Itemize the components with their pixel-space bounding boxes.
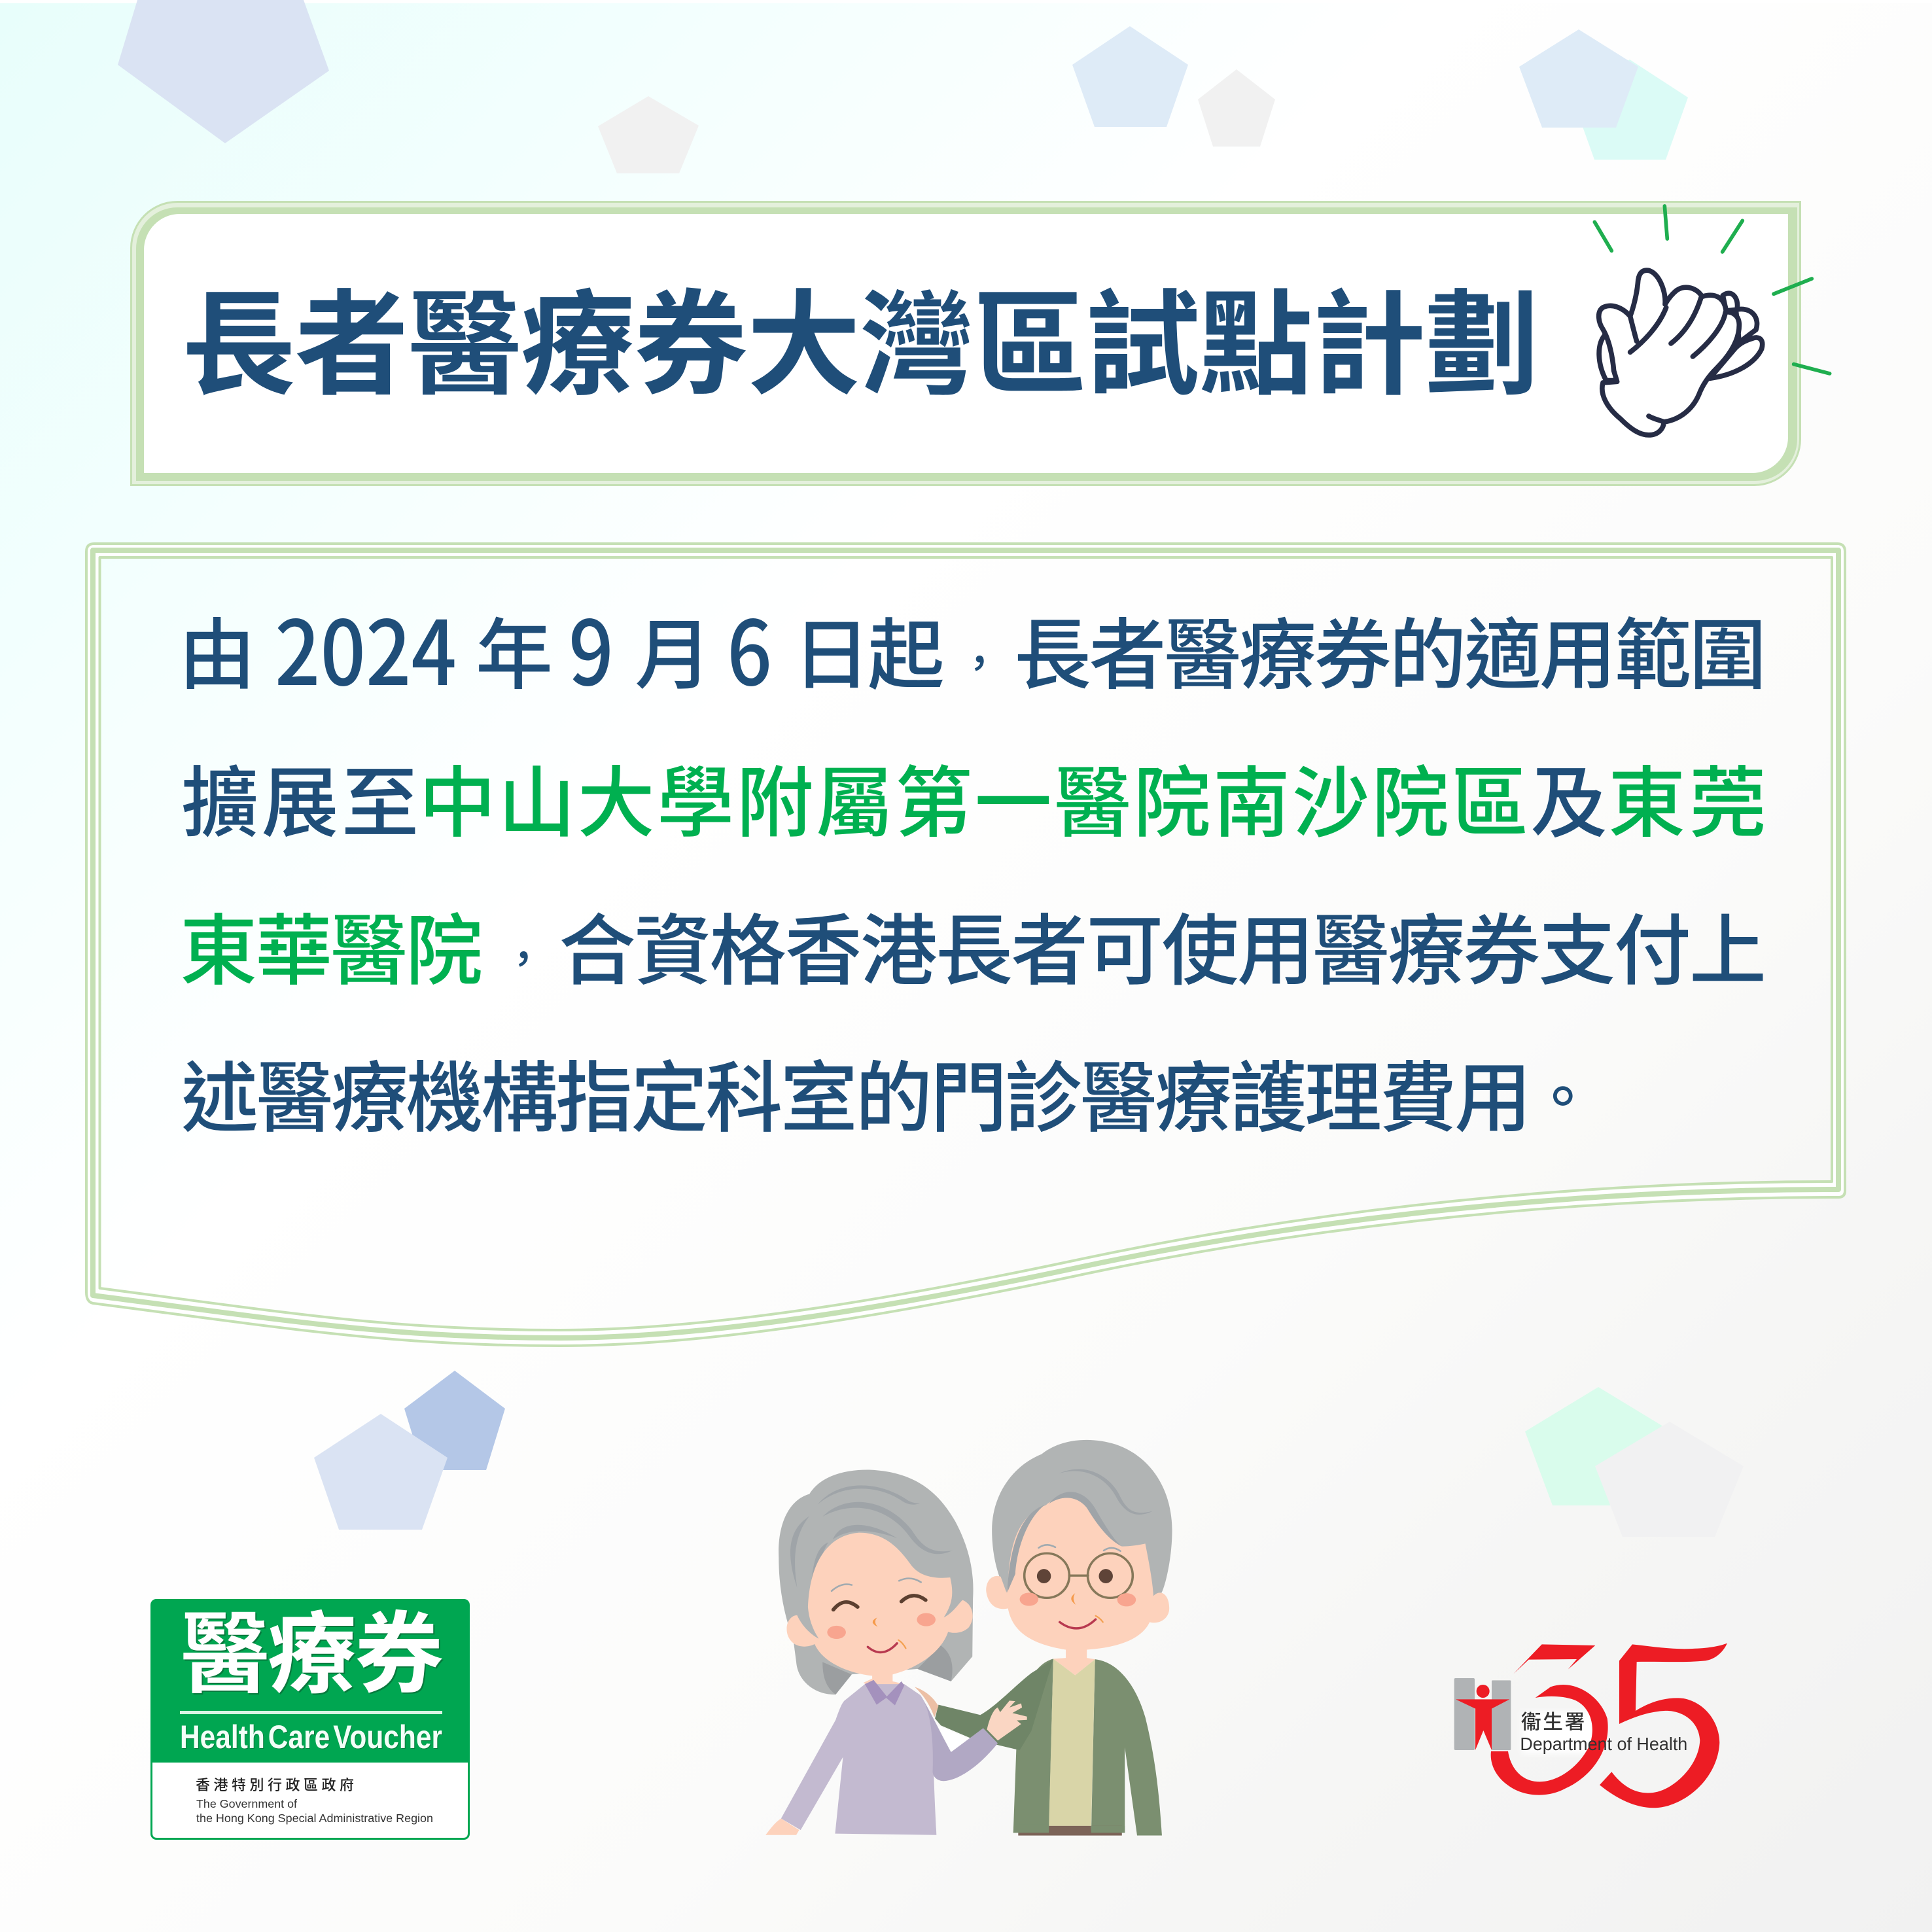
line 1: 2024 [275, 582, 457, 711]
line 3: 東華醫院 [180, 888, 483, 1000]
government English name: The Government of [196, 1797, 297, 1810]
text block: body paragraph [179, 582, 1766, 1148]
panel: title frame [130, 201, 1801, 486]
pentagon: dark blue lower left [404, 1371, 505, 1470]
white glow behind wordmark [1522, 1712, 1596, 1753]
man [915, 1440, 1172, 1836]
emblem [1454, 1678, 1511, 1750]
line 1: 9 [569, 582, 614, 711]
pentagon: light blue lower left [314, 1414, 448, 1530]
line 3: 合資格香港長者可使用醫療券支付上 [559, 888, 1766, 1000]
pentagon: large top left [118, 0, 329, 143]
pentagon: grey top centre [1198, 69, 1275, 147]
line 2: 中山大學附屬第一醫院南沙院區 [419, 741, 1528, 852]
divider [180, 1711, 442, 1714]
numeral 5 [1600, 1643, 1727, 1808]
line 1: 月 [635, 593, 712, 705]
line 1: 由 [179, 593, 256, 705]
line 2: 擴展至 [181, 741, 419, 852]
line 1: ， [958, 629, 1001, 692]
line 2: 東莞 [1608, 741, 1766, 852]
line 4: 。 [1532, 1048, 1594, 1138]
pentagon: mint lower right [1525, 1387, 1672, 1505]
decorative pentagons [118, 0, 1744, 1537]
line 2: 及 [1530, 741, 1607, 852]
icon: clapping hands [1594, 206, 1830, 435]
department Chinese name: 衞生署 [1521, 1706, 1585, 1735]
line 1: 6 [727, 582, 772, 711]
logo: Department of Health 35th anniversary [1454, 1643, 1727, 1808]
pentagon: blue top right [1519, 29, 1638, 128]
pentagon: teal top right [1572, 60, 1688, 160]
line 4: 述醫療機構指定科室的門診醫療護理費用 [181, 1036, 1532, 1148]
department English name: Department of Health [1520, 1734, 1687, 1754]
title: 長者醫療券大灣區試點計劃 [182, 253, 1539, 418]
illustration: elderly couple [765, 1440, 1172, 1836]
woman [765, 1470, 1027, 1835]
voucher Chinese name: 醫療券 [181, 1583, 444, 1712]
line 1: 起 [868, 593, 945, 705]
pentagon: blue top centre [1072, 26, 1188, 127]
numeral 3 [1491, 1644, 1608, 1795]
line 3: ， [502, 924, 545, 987]
voucher English name: Health Care Voucher [180, 1719, 442, 1755]
line 2 [181, 741, 1766, 852]
sparkle lines [1594, 206, 1830, 374]
line 1: 日 [793, 593, 870, 705]
back hand and front hand outlines [1599, 270, 1763, 435]
logo: Health Care Voucher [150, 1583, 470, 1840]
panel: body text frame [86, 544, 1845, 1346]
government English name line 2: the Hong Kong Special Administrative Region [196, 1812, 433, 1825]
pentagon: grey lower right [1595, 1422, 1744, 1537]
line 1: 年 [476, 593, 553, 705]
line 1 [179, 582, 1766, 711]
line 1: 長者醫療券的適用範圍 [1014, 593, 1766, 705]
government Chinese name: 香港特別行政區政府 [196, 1774, 354, 1795]
pentagon: small grey top [598, 96, 699, 173]
